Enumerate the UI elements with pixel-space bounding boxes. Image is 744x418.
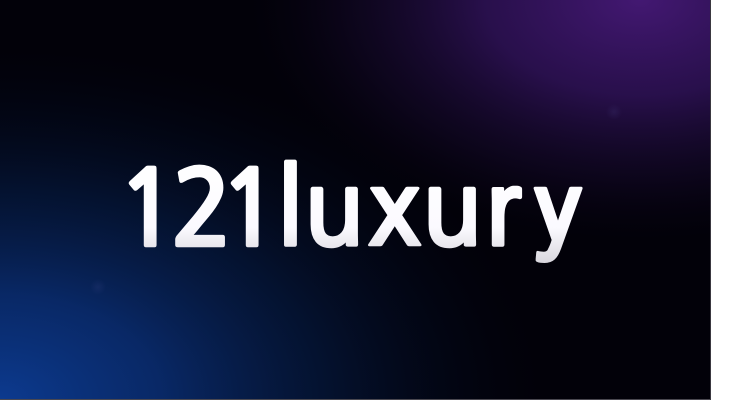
- title: 121luxury: 121luxury: [116, 158, 583, 262]
